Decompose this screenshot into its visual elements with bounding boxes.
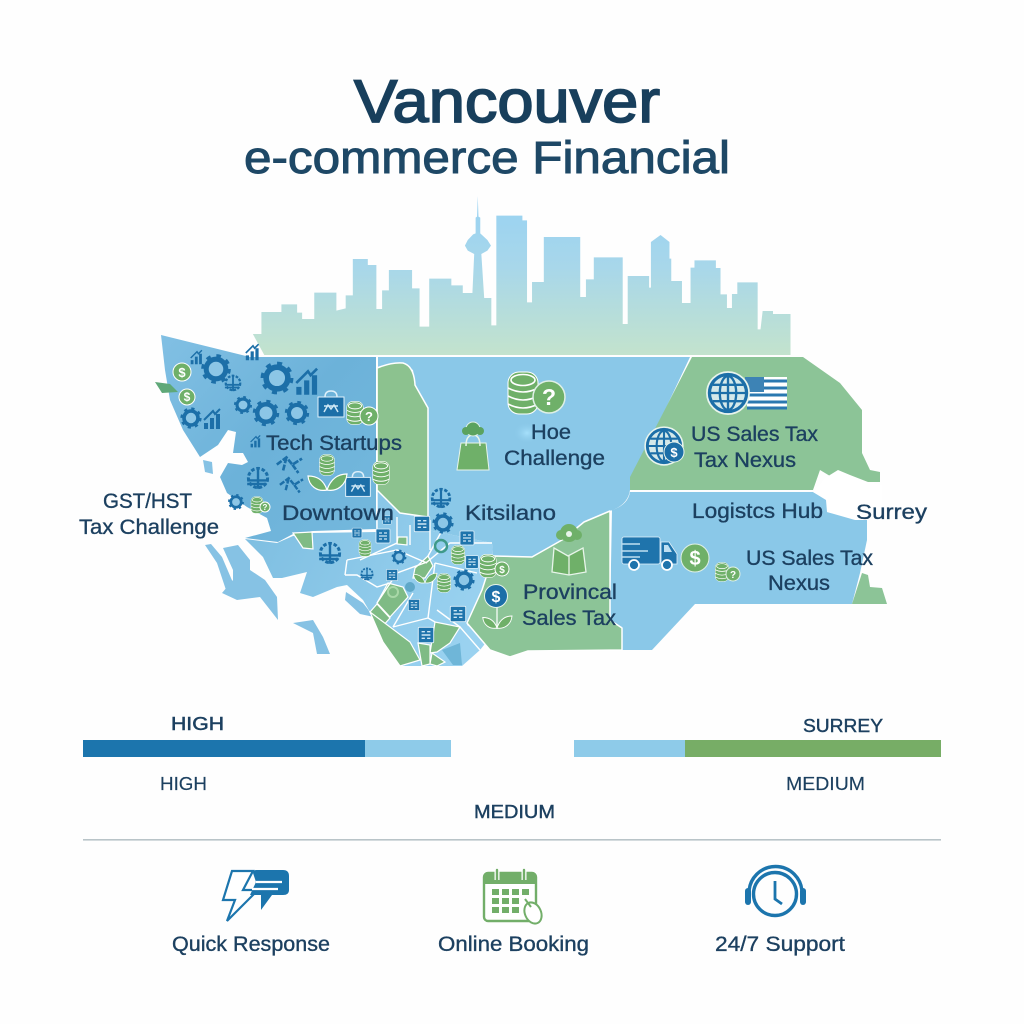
icon: globe and flag xyxy=(707,372,787,414)
region: us sales tax green xyxy=(630,357,880,490)
map labels: Downtown xyxy=(282,502,394,525)
icon: green dollar badges west: ? xyxy=(365,409,373,424)
title xyxy=(244,68,730,183)
region: lower west and centre xyxy=(245,490,493,666)
icons: centre mosaic: $ xyxy=(499,565,505,576)
support labels: Quick Response xyxy=(172,933,330,956)
icon: green dollar badges west: $ xyxy=(184,390,191,404)
map labels: Logistcs Hub xyxy=(692,500,823,523)
icon: delivery truck xyxy=(622,537,677,570)
icon: green dollar badges west: $ xyxy=(178,365,186,380)
icon: online booking xyxy=(484,870,545,926)
text glitch glow xyxy=(513,422,541,444)
teal coast zone xyxy=(442,643,462,665)
map labels: GST/HST xyxy=(103,490,192,513)
map labels: Surrey xyxy=(856,501,928,524)
map labels: Nexus xyxy=(768,572,830,595)
map labels: Tech Startups xyxy=(266,432,402,455)
icon: green dollar badges west: ? xyxy=(263,503,268,512)
map labels: US Sales Tax xyxy=(746,547,874,570)
map labels: Sales Tax xyxy=(522,607,617,630)
region: small green east xyxy=(852,573,887,604)
icon: shopping bag with flower xyxy=(457,422,489,470)
icon: quick response xyxy=(223,870,289,921)
icon: open box with flower xyxy=(552,524,586,575)
icon: 24/7 support xyxy=(745,866,806,916)
map labels: Provincal xyxy=(523,581,617,604)
map labels: Challenge xyxy=(504,447,605,470)
skyline xyxy=(253,196,790,355)
bar labels: SURREY xyxy=(803,716,883,736)
map labels: Kitsilano xyxy=(465,502,556,525)
bar: high xyxy=(83,740,451,757)
title: Vancouver xyxy=(354,68,660,135)
icon: coin stack with question: ? xyxy=(542,384,556,410)
bar labels: MEDIUM xyxy=(474,802,555,822)
map xyxy=(79,335,928,666)
icon: small coins and question: ? xyxy=(730,570,736,581)
title: e-commerce Financial xyxy=(244,132,730,183)
icon: green dollar badge: $ xyxy=(689,548,701,570)
region: centre light blue xyxy=(378,357,690,557)
map labels: Tax Challenge xyxy=(79,516,219,539)
icon: coin stack with question xyxy=(508,372,565,414)
support labels: 24/7 Support xyxy=(715,933,845,956)
icons: centre mosaic xyxy=(352,488,509,643)
icon: green dollar badges west xyxy=(173,363,378,512)
icon: small coins and question xyxy=(715,563,740,581)
icon: globe with dollar xyxy=(645,427,684,465)
support labels: Online Booking xyxy=(438,933,589,956)
bar labels: MEDIUM xyxy=(786,774,865,794)
icon: dollar flower: $ xyxy=(492,589,501,606)
bar: surrey xyxy=(574,740,941,757)
bar labels: HIGH xyxy=(160,774,207,794)
map labels: US Sales Tax xyxy=(691,423,819,446)
bar labels: HIGH xyxy=(171,714,224,734)
support labels xyxy=(172,933,845,956)
icon: globe with dollar: $ xyxy=(670,445,678,460)
icon: green dollar badge xyxy=(681,544,709,572)
icons: tech startups xyxy=(155,344,389,564)
region: green strip xyxy=(377,363,428,517)
icon: dollar flower xyxy=(483,584,512,629)
lake xyxy=(813,470,882,520)
map labels: Hoe xyxy=(531,421,571,444)
region: logistics blue xyxy=(610,492,867,650)
islands xyxy=(203,460,374,654)
green mosaic zones xyxy=(293,532,460,666)
map labels xyxy=(79,421,928,630)
map labels: Tax Nexus xyxy=(694,449,796,472)
region: tech startups west xyxy=(161,335,376,542)
region: provincial sales tax green xyxy=(467,511,622,657)
bar labels xyxy=(160,714,883,822)
mosaic boundary lines xyxy=(345,357,492,650)
